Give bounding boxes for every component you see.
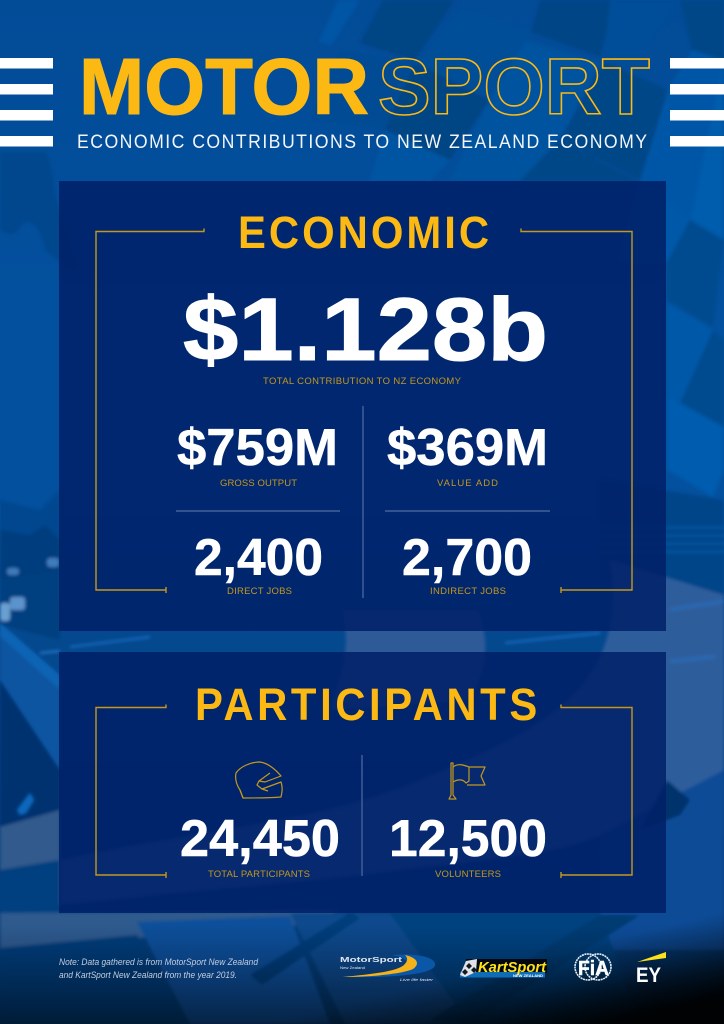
grey track bands <box>0 810 60 870</box>
source note: Note: Data gathered is from MotorSport New Zealand <box>59 957 259 967</box>
icon: flag <box>449 763 485 799</box>
title <box>79 42 650 131</box>
icon: racing helmet <box>236 762 282 798</box>
logo: KartSport New Zealand: NEW ZEALAND <box>513 974 543 978</box>
debris mark <box>17 793 34 815</box>
stat: indirect jobs: INDIRECT JOBS <box>430 586 506 597</box>
track band right <box>600 480 724 600</box>
stat: volunteers: VOLUNTEERS <box>435 869 501 880</box>
logo: KartSport New Zealand: KartSport <box>478 959 547 976</box>
gap streaks <box>70 636 150 648</box>
cars <box>7 568 19 575</box>
stat: value add: $369M <box>387 419 548 477</box>
source note <box>59 957 259 980</box>
right lower <box>600 770 724 950</box>
stat: gross output: GROSS OUTPUT <box>220 478 297 489</box>
stat: total contribution: TOTAL CONTRIBUTION TO NZ ECONOMY <box>263 376 462 387</box>
stat: direct jobs: DIRECT JOBS <box>227 586 292 597</box>
panel: participants <box>59 652 666 913</box>
title stripes left <box>0 58 53 146</box>
stat: direct jobs: 2,400 <box>194 529 323 587</box>
bottom kerb <box>137 916 330 1024</box>
heading: participants: PARTICIPANTS <box>195 681 537 730</box>
stat: value add: VALUE ADD <box>437 478 498 489</box>
road and kerb <box>0 625 60 770</box>
logo: FIA: FiA <box>578 958 609 980</box>
panel: economic <box>59 181 666 631</box>
helmet silhouette top left <box>0 152 80 270</box>
title: SPORT <box>378 42 650 131</box>
logo: MotorSport New Zealand: MotorSport <box>340 955 403 964</box>
logo: EY <box>636 952 666 987</box>
grey S curve <box>60 560 724 905</box>
logo: MotorSport New Zealand: Live life faster <box>400 978 434 982</box>
stat: total participants: TOTAL PARTICIPANTS <box>208 869 310 880</box>
stat: volunteers: 12,500 <box>389 810 547 868</box>
logo: MotorSport New Zealand <box>340 955 435 982</box>
checker tiles <box>360 0 455 60</box>
title: MOTOR <box>79 42 369 131</box>
left hillside and trees <box>0 490 60 560</box>
bracket frame: economic <box>96 228 632 593</box>
subtitle: ECONOMIC CONTRIBUTIONS TO NEW ZEALAND ECONOMY <box>77 130 647 152</box>
logo: EY: EY <box>636 964 661 987</box>
title stripes right <box>670 58 724 146</box>
heading: economic: ECONOMIC <box>238 209 489 258</box>
logo: MotorSport New Zealand: New Zealand <box>340 966 365 970</box>
stat: total participants: 24,450 <box>180 810 340 868</box>
stat: gross output: $759M <box>177 419 338 477</box>
bracket frame: participants <box>96 704 632 878</box>
stat: total contribution: $1.128b <box>183 279 548 379</box>
source note: and KartSport New Zealand from the year 2019. <box>59 970 237 980</box>
stat: indirect jobs: 2,700 <box>402 529 532 587</box>
